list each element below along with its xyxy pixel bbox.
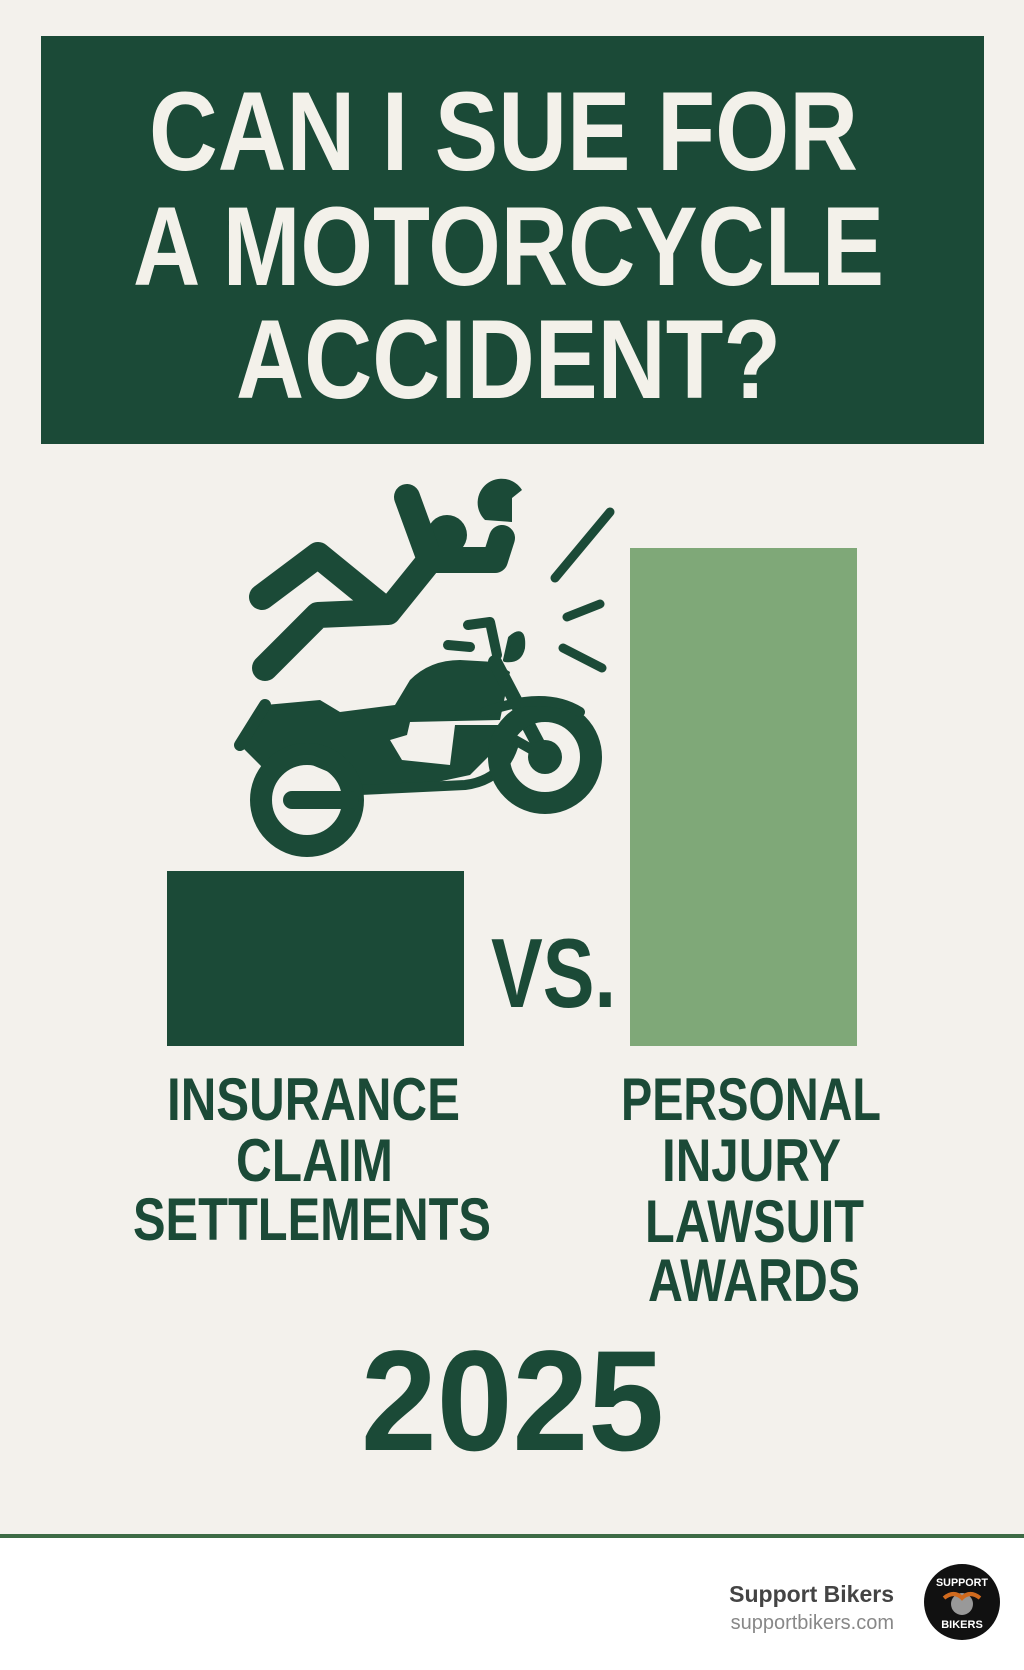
icon: falling rider and motorcycle	[240, 479, 610, 846]
label: insurance claim settlements: INSURANCE	[167, 1066, 460, 1133]
motorcycle body	[240, 660, 510, 790]
label: personal injury lawsuit awards: LAWSUIT	[645, 1188, 864, 1255]
footer brand text	[729, 1581, 894, 1634]
label: insurance claim settlements	[133, 1066, 491, 1253]
label: personal injury lawsuit awards	[621, 1066, 881, 1314]
label: personal injury lawsuit awards: PERSONAL	[621, 1066, 881, 1133]
title text: ACCIDENT?	[236, 297, 781, 422]
logo badge: SUPPORT	[936, 1577, 988, 1589]
label: insurance claim settlements: CLAIM	[236, 1127, 393, 1194]
title banner	[41, 36, 984, 444]
year: 2025	[361, 1322, 664, 1481]
footer brand text: supportbikers.com	[731, 1612, 894, 1634]
bar: lawsuit awards	[630, 548, 857, 1046]
logo badge	[924, 1564, 1000, 1640]
label: insurance claim settlements: SETTLEMENTS	[133, 1186, 491, 1253]
label: personal injury lawsuit awards: INJURY	[662, 1127, 841, 1194]
vs label: VS.	[491, 918, 616, 1028]
footer	[0, 1534, 1024, 1670]
title text: CAN I SUE FOR	[149, 69, 858, 194]
footer brand text: Support Bikers	[729, 1581, 894, 1607]
logo badge: BIKERS	[941, 1619, 983, 1631]
label: personal injury lawsuit awards: AWARDS	[648, 1247, 860, 1314]
bar: insurance settlements	[167, 871, 464, 1046]
title text	[133, 69, 884, 422]
